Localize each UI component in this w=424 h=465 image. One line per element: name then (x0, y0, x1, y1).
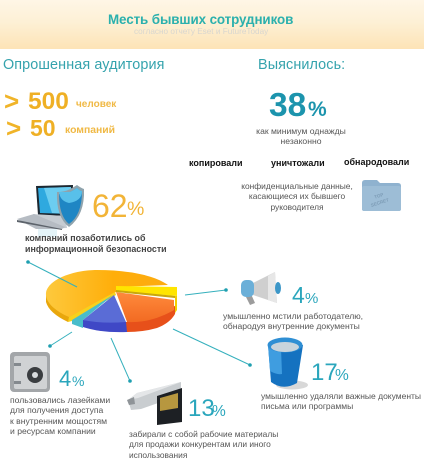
text: took revenge on employer (223, 311, 363, 331)
text: confidential data: руководителя (270, 202, 324, 212)
connector lines (26, 260, 252, 383)
text: took revenge on employer: умышленно мстили работодателю, (223, 311, 363, 321)
stat: 62 percent: 62 (92, 188, 128, 224)
text: took revenge on employer: обнародуя внутренние документы (223, 321, 360, 331)
text: companies cared about security: информационной безопасности (25, 244, 167, 254)
stat: 62 percent (92, 188, 144, 224)
text: used loopholes: и ресурсам компании (10, 426, 96, 436)
icon: safe (10, 352, 50, 392)
stat: 50 companies: 50 (30, 115, 56, 141)
stat: 13 percent: 13 (188, 395, 215, 422)
pie slice: 62 percent (46, 270, 168, 322)
pie slice: 4 percent teal (72, 295, 113, 328)
text: at least once illegally: незаконно (281, 136, 321, 146)
text: at least once illegally (256, 126, 346, 146)
label: destroyed: уничтожали (271, 158, 325, 168)
icon: secret folder: SECRET (370, 197, 390, 208)
stat: 50 companies: > (6, 113, 21, 143)
text: companies cared about security (25, 233, 167, 254)
stat: 4 percent leak (292, 282, 318, 308)
pie slice: 13 percent blue (83, 295, 127, 332)
stat: 50 companies (6, 113, 115, 143)
text: confidential data (241, 181, 353, 212)
text: used loopholes: для получения доступа (10, 405, 103, 415)
text: at least once illegally: как минимум однажды (256, 126, 346, 136)
stat: 500 people (4, 86, 116, 116)
text: used loopholes: к внутренним мощостям (10, 416, 107, 426)
icon: usb drive (127, 382, 182, 425)
label: published: обнародовали (344, 157, 409, 167)
stat: 38 percent (269, 87, 327, 124)
label: copied: копировали (189, 158, 243, 168)
text: deleted important documents (261, 391, 421, 411)
text: confidential data: конфиденциальные данные, (241, 181, 353, 191)
stat: 500 people: 500 (28, 88, 69, 115)
stat: 4 percent leak: % (305, 290, 318, 307)
stat: 4 percent loopholes: 4 (59, 366, 71, 391)
icon: recycle bin (268, 338, 308, 390)
stat: 17 percent: % (335, 367, 349, 384)
stat: 62 percent: % (127, 198, 144, 220)
stat: 50 companies: компаний (65, 125, 115, 136)
stat: 500 people: > (4, 86, 19, 116)
pie slice: 17 percent orange (116, 292, 176, 332)
header band (0, 0, 424, 49)
subtitle: согласно отчету Eset и FutureToday (134, 27, 268, 36)
stat: 38 percent: % (308, 98, 327, 121)
stat: 4 percent loopholes: % (72, 373, 84, 389)
heading: findings: Выяснилось: (258, 57, 345, 73)
text: deleted important documents: письма или программы (261, 401, 353, 411)
text: used loopholes: пользовались лазейками (10, 395, 110, 405)
text: took work materials (129, 429, 278, 460)
text: took work materials: для продажи конкурентам или иного (129, 439, 271, 449)
text: companies cared about security: компаний позаботились об (25, 233, 145, 243)
stat: 17 percent: 17 (311, 359, 338, 386)
text: used loopholes (10, 395, 110, 436)
text: took work materials: использования (129, 450, 187, 460)
text: took work materials: забирали с собой рабочие материалы (129, 429, 278, 439)
icon: megaphone (241, 272, 281, 305)
pie slice: 4 percent yellow (116, 286, 177, 313)
heading: surveyed audience: Опрошенная аудитория (3, 57, 164, 73)
stat: 38 percent: 38 (269, 87, 306, 124)
stat: 4 percent loopholes (59, 366, 84, 391)
text: deleted important documents: умышленно удаляли важные документы (261, 391, 421, 401)
title: Месть бывших сотрудников (108, 12, 293, 27)
pie chart (46, 270, 177, 332)
stat: 13 percent: % (212, 403, 226, 420)
text: confidential data: касающиеся их бывшего (249, 191, 345, 201)
stat: 500 people: человек (76, 99, 116, 110)
stat: 4 percent leak: 4 (292, 282, 305, 308)
icon: laptop with shield (17, 185, 84, 237)
icon: secret folder: TOP (374, 192, 384, 200)
icon: secret folder (362, 180, 401, 211)
